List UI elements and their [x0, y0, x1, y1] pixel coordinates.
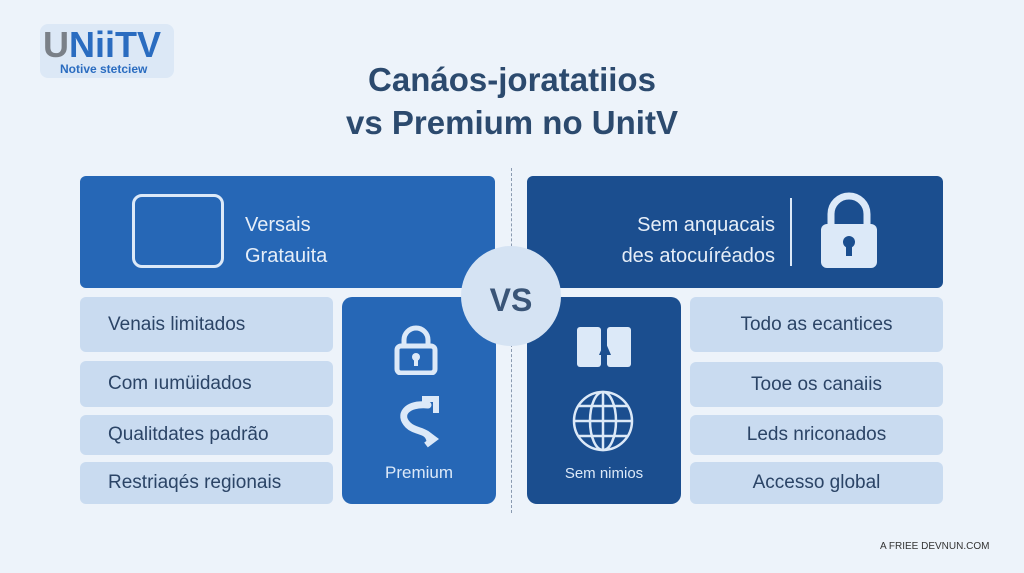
divider dashed: [511, 168, 512, 513]
label premium: Premium: [385, 463, 453, 482]
item 2: [80, 361, 333, 407]
title: vs Premium no UnitV: [346, 104, 678, 141]
title: Canáos-joratatiios: [368, 61, 656, 98]
VS circle: VS: [490, 282, 532, 318]
item 2: Tooe os canaiis: [751, 374, 882, 394]
icon: split box: [577, 327, 631, 367]
item 3: [80, 415, 333, 455]
item 4: Accesso global: [753, 472, 880, 493]
item 3: [690, 415, 943, 455]
VS circle: [461, 246, 561, 346]
free header text: Gratauita: [245, 245, 327, 267]
item 2: Com ıumüidados: [108, 373, 252, 394]
icon: arrows: [400, 396, 439, 448]
item 4: [690, 462, 943, 504]
item 3: Qualitdates padrão: [108, 424, 269, 445]
premium header text: des atocuíréados: [622, 245, 775, 267]
label sem nimios: Sem nimios: [565, 465, 643, 482]
icon: tv: [132, 194, 224, 268]
panel: global icons: [527, 297, 681, 504]
item 1: [80, 297, 333, 352]
icon: small lock: [394, 326, 438, 375]
list: premium features: [690, 297, 943, 504]
logo: [40, 24, 174, 78]
panel: premium icons: [342, 297, 496, 504]
panel: premium header: [527, 176, 943, 288]
premium header text: Sem anquacais: [637, 214, 775, 236]
premium header text: [622, 214, 775, 267]
item 4: Restriaqés regionais: [108, 472, 281, 493]
item 3: Leds nriconados: [747, 424, 886, 445]
free header text: [245, 214, 328, 267]
item 1: Todo as ecantices: [740, 314, 893, 334]
panel: free header: [80, 176, 495, 288]
icon: globe: [572, 390, 634, 452]
footer credit: A FRIEE DEVNUN.COM: [880, 541, 989, 552]
item 1: [690, 297, 943, 352]
icon: lock: [821, 192, 877, 268]
item 1: Venais limitados: [108, 314, 245, 334]
item 4: [80, 462, 333, 504]
list: free features: [80, 297, 333, 504]
free header text: Versais: [245, 214, 311, 236]
logo wordmark: UNiiTV: [43, 24, 161, 65]
title: [346, 61, 678, 141]
item 2: [690, 362, 943, 407]
logo tagline: Notive stetciew: [60, 62, 147, 76]
